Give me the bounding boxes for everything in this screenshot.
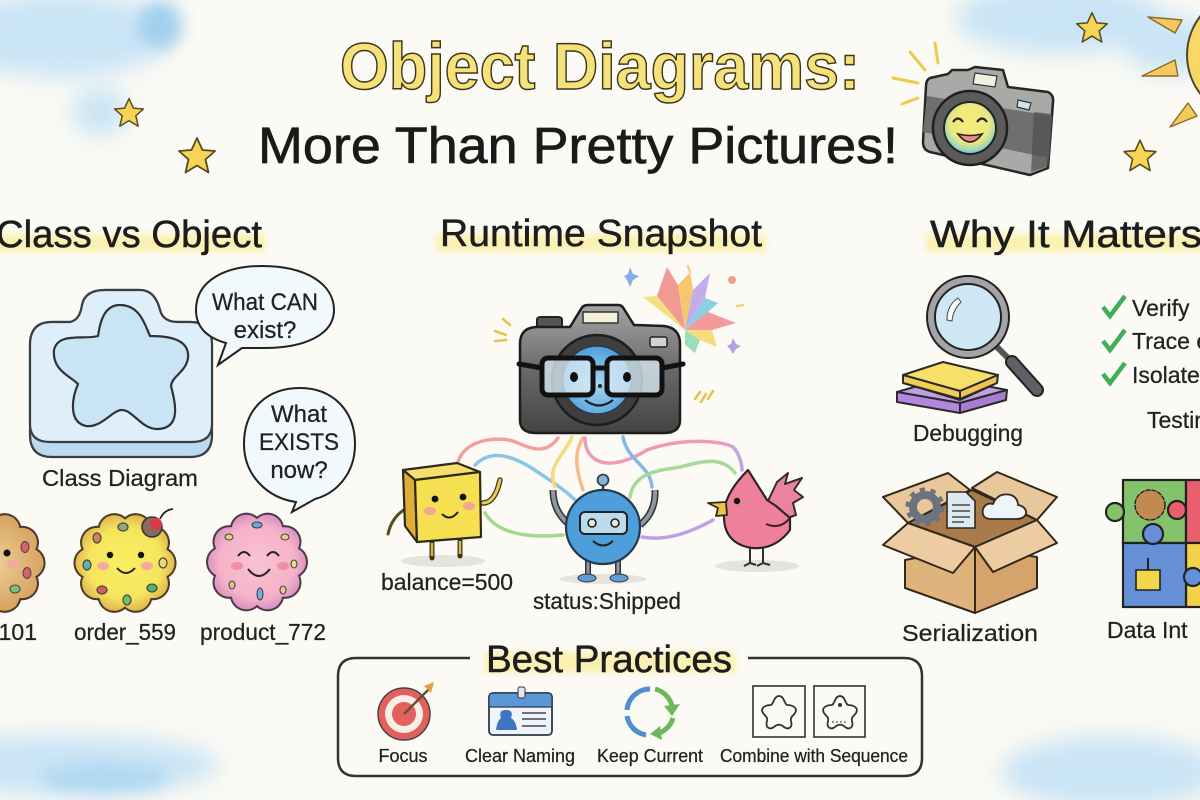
object: cookie product_772 (200, 514, 326, 645)
icon: name badge (489, 687, 552, 735)
section heading: Runtime Snapshot: Runtime Snapshot (440, 213, 762, 255)
speech bubble: What EXISTS now?: now? (270, 457, 328, 484)
label: data integrity: Data Int (1107, 617, 1188, 643)
label: debugging: Debugging (913, 420, 1023, 446)
object: cookie order_559 (74, 509, 176, 645)
title (258, 29, 898, 174)
icon: sun (1142, 0, 1200, 127)
title line 1: Object Diagrams: (340, 29, 860, 103)
speech bubble: What EXISTS now?: What (271, 401, 327, 428)
icon: combine cards (753, 686, 865, 737)
speech bubble: What CAN exist? (196, 266, 334, 365)
icon: colour burst (624, 266, 743, 354)
icon: camera with glasses (495, 305, 713, 433)
icon: magnifying glass (931, 280, 1037, 390)
label: product_772 (200, 619, 326, 645)
speech bubble: What CAN exist?: exist? (234, 317, 296, 344)
check item: Verify: Verify (1132, 295, 1190, 321)
speech bubble: What EXISTS now? (244, 388, 355, 512)
label: focus: Focus (378, 746, 428, 766)
icon: book stack (897, 362, 1007, 413)
label: clear naming: Clear Naming (465, 746, 575, 766)
heading: best practices: Best Practices (486, 639, 732, 681)
label: order_559 (74, 619, 176, 645)
label: balance=500 (381, 569, 513, 595)
section heading: Why It Matters: Why It Matters (930, 214, 1200, 256)
label: class diagram: Class Diagram (42, 465, 198, 491)
connection threads (458, 437, 742, 538)
character: blue robot object (533, 474, 681, 614)
icon: data integrity puzzle (1106, 480, 1200, 643)
icon: serialization box (883, 472, 1057, 613)
speech bubble: What CAN exist?: What CAN (212, 289, 318, 316)
section heading: Class vs Object: Class vs Object (0, 214, 262, 256)
object: cookie customer_101 (0, 514, 45, 645)
label: serialization: Serialization (902, 620, 1038, 646)
character: pink bird object (708, 470, 803, 572)
character: yellow block object (381, 463, 513, 595)
speech bubble: What EXISTS now?: EXISTS (259, 429, 339, 456)
checklist (1103, 295, 1200, 433)
label: status:Shipped (533, 588, 681, 614)
panel: best practices (338, 639, 922, 776)
title line 2: More Than Pretty Pictures! (258, 117, 898, 174)
icon: smiling camera (893, 43, 1053, 175)
icon: refresh arrows (627, 689, 680, 740)
icon: class diagram cookie cutter (30, 290, 212, 491)
check item: Isolate: Isolate (1132, 362, 1200, 388)
label: combine with sequence: Combine with Sequence (720, 746, 908, 766)
decorative stars (115, 13, 1156, 173)
icon: target (378, 682, 434, 740)
label: keep current: Keep Current (597, 746, 703, 766)
